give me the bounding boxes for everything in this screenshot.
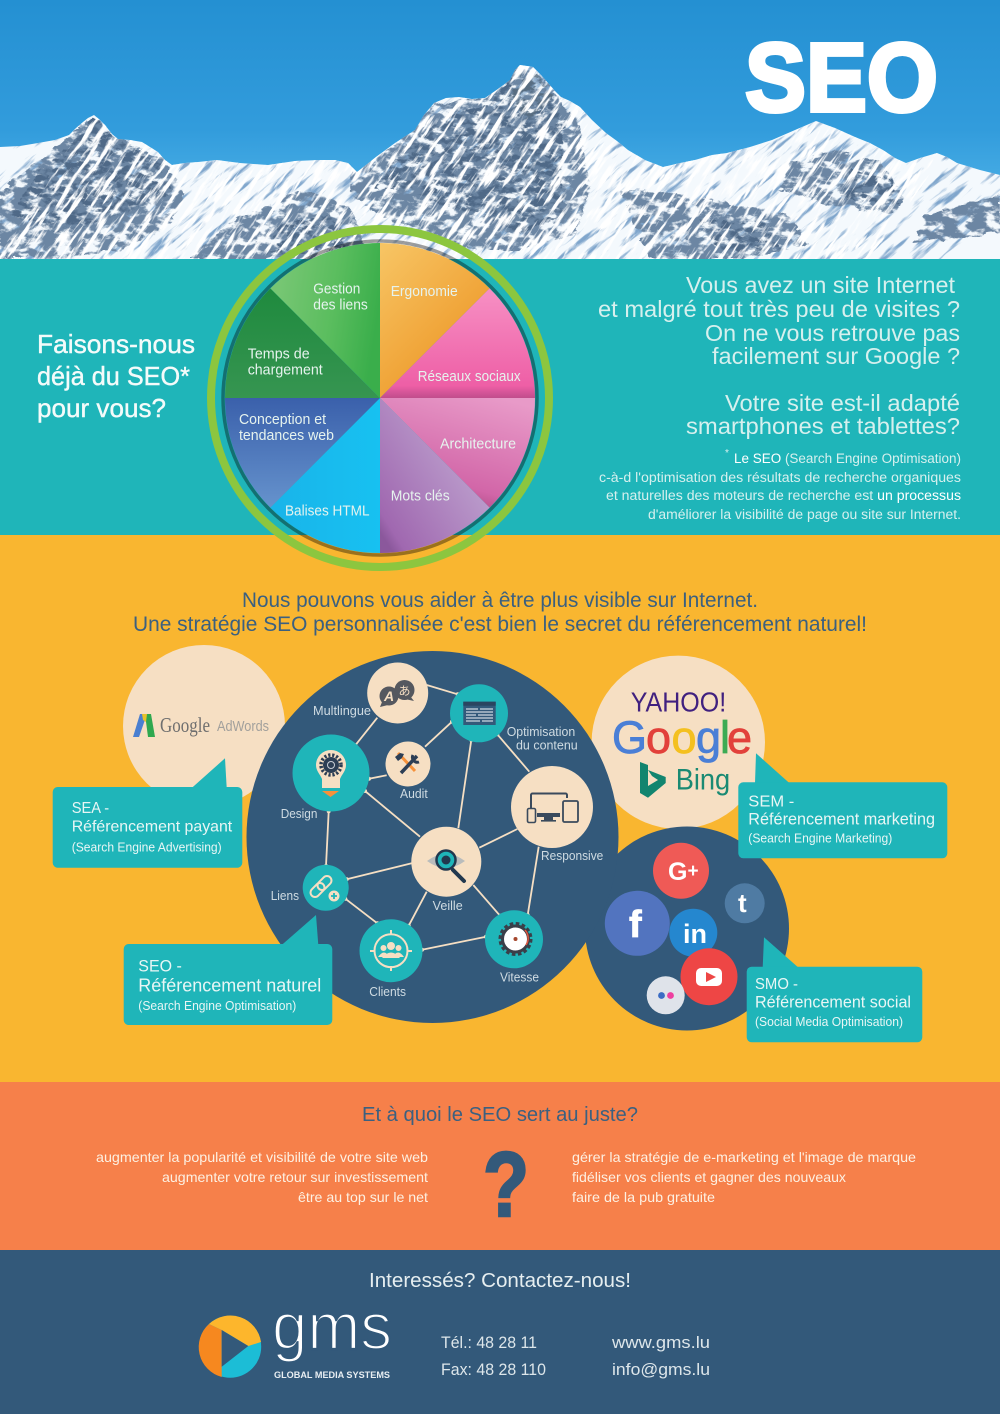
icon: Google plus: G bbox=[668, 858, 687, 886]
benefits heading: Et à quoi le SEO sert au juste? bbox=[362, 1104, 638, 1126]
callout: SEO: SEO - bbox=[138, 957, 182, 976]
SEO definition text: d'améliorer la visibilité de page ou site sur Internet. bbox=[648, 507, 961, 522]
pie labels: Réseaux sociaux bbox=[418, 369, 521, 385]
icon: question mark: ? bbox=[483, 1134, 529, 1236]
node: Optimisation du contenu bbox=[450, 684, 508, 742]
node: Multilingue bbox=[367, 662, 428, 724]
benefits list left: augmenter la popularité et visibilité de votre site web bbox=[96, 1149, 428, 1165]
callout: SEM: Référencement marketing bbox=[748, 811, 935, 829]
logo wordmark: gms bbox=[272, 1289, 392, 1363]
contact heading: Interessés? Contactez-nous! bbox=[369, 1270, 631, 1292]
logo: Google: l bbox=[720, 712, 730, 763]
SEO definition text bbox=[599, 448, 961, 522]
panel: contact band bbox=[0, 1250, 1000, 1414]
node: Audit bbox=[386, 742, 430, 786]
logo: Yahoo: YAHOO! bbox=[631, 687, 726, 718]
icon: YouTube bbox=[680, 948, 738, 1005]
intro questions text: On ne vous retrouve pas bbox=[705, 320, 960, 346]
SEM bubble: search engines bbox=[592, 656, 765, 829]
node: Vitesse bbox=[485, 910, 543, 968]
banner: mountain photo bbox=[0, 0, 1000, 259]
pie labels: chargement bbox=[248, 362, 323, 378]
node labels: Vitesse bbox=[500, 971, 539, 985]
callout: SEO: (Search Engine Optimisation) bbox=[138, 999, 296, 1013]
pie labels: Gestion bbox=[313, 282, 360, 298]
node labels bbox=[271, 704, 603, 999]
callout: SEM bbox=[738, 753, 947, 858]
pie labels: Ergonomie bbox=[391, 284, 458, 300]
icon: Google plus bbox=[653, 843, 709, 899]
icon: Tumblr bbox=[725, 883, 765, 923]
logo: Google: G bbox=[612, 712, 647, 763]
callout: SEO bbox=[124, 915, 332, 1025]
icon: Flickr bbox=[647, 976, 685, 1014]
logo: Google: o bbox=[646, 712, 671, 763]
callout: SEM: SEM - bbox=[748, 794, 794, 811]
contact details: info@gms.lu bbox=[612, 1360, 710, 1379]
intro questions text: Vous avez un site Internet bbox=[686, 272, 956, 298]
callout: SEM: (Search Engine Marketing) bbox=[748, 832, 892, 846]
intro questions text: et malgré tout très peu de visites ? bbox=[598, 296, 960, 322]
SEO definition text: * bbox=[725, 448, 729, 459]
benefits list left: augmenter votre retour sur investissement bbox=[162, 1169, 428, 1185]
node: Design bbox=[292, 734, 370, 812]
panel: strategy band bbox=[0, 535, 1000, 1082]
pie labels: Temps de bbox=[248, 346, 310, 362]
node labels: Audit bbox=[400, 787, 428, 801]
callout: SEO: Référencement naturel bbox=[138, 976, 321, 996]
logo: Google: e bbox=[727, 712, 752, 763]
logo: Google: o bbox=[672, 712, 697, 763]
icon: Tumblr: t bbox=[738, 888, 747, 918]
strategy heading bbox=[133, 589, 867, 636]
logo: GMS bbox=[199, 1289, 392, 1381]
pie labels: Conception et bbox=[239, 412, 326, 428]
benefits list right: gérer la stratégie de e-marketing et l'image de marque bbox=[572, 1149, 916, 1165]
pie labels: tendances web bbox=[239, 428, 334, 444]
SEO definition text: Le SEO (Search Engine Optimisation) bbox=[734, 451, 961, 466]
logo mark bbox=[199, 1315, 261, 1378]
pie labels: des liens bbox=[313, 298, 368, 314]
pie chart: SEO factors bbox=[211, 229, 549, 567]
icon: Google plus: + bbox=[687, 861, 699, 882]
node: Veille bbox=[411, 827, 481, 897]
connector lines bbox=[324, 685, 539, 952]
icon: Facebook bbox=[605, 891, 670, 956]
intro questions text bbox=[598, 272, 960, 439]
panel: intro band bbox=[0, 259, 1000, 535]
mountains bbox=[0, 65, 1000, 259]
logo: Bing bbox=[640, 762, 730, 798]
callout: SEA: Référencement payant bbox=[72, 819, 233, 836]
SEA bubble: Google AdWords bbox=[123, 645, 285, 807]
contact details: Tél.: 48 28 11 bbox=[441, 1333, 537, 1352]
heading: Faisons-nous: Faisons-nous bbox=[37, 329, 195, 359]
callout: SMO: Référencement social bbox=[755, 994, 911, 1012]
title: SEO: SEO bbox=[745, 23, 938, 132]
heading: Faisons-nous bbox=[37, 329, 195, 423]
pie labels bbox=[239, 282, 521, 520]
contact details bbox=[441, 1333, 710, 1379]
benefits list right: faire de la pub gratuite bbox=[572, 1189, 715, 1205]
node labels: Liens bbox=[271, 889, 299, 903]
node: Multilingue: A bbox=[383, 688, 394, 704]
intro questions text: smartphones et tablettes? bbox=[686, 413, 960, 439]
pie labels: Architecture bbox=[440, 436, 516, 452]
node: Clients bbox=[360, 919, 422, 982]
node: Liens bbox=[303, 865, 349, 911]
callout: SMO bbox=[747, 937, 922, 1042]
callout: SEA: (Search Engine Advertising) bbox=[72, 841, 222, 855]
heading: Faisons-nous: pour vous? bbox=[37, 393, 166, 423]
node labels: Optimisation bbox=[507, 725, 575, 739]
node labels: Veille bbox=[433, 899, 463, 913]
icon: AdWords bbox=[133, 714, 155, 737]
callout: SMO: SMO - bbox=[755, 976, 798, 993]
logo tagline: GLOBAL MEDIA SYSTEMS bbox=[274, 1370, 390, 1381]
network diagram bbox=[246, 651, 618, 1023]
contact details: www.gms.lu bbox=[611, 1333, 710, 1352]
icon: LinkedIn: in bbox=[683, 919, 707, 949]
node labels: Clients bbox=[369, 985, 406, 999]
pie labels: Balises HTML bbox=[285, 504, 370, 520]
benefits list right bbox=[572, 1149, 916, 1205]
panel: benefits band bbox=[0, 1082, 1000, 1250]
node: Responsive bbox=[511, 766, 593, 848]
intro questions text: Votre site est-il adapté bbox=[725, 390, 960, 416]
strategy heading: Nous pouvons vous aider à être plus visible sur Internet. bbox=[242, 589, 758, 612]
contact details: Fax: 48 28 110 bbox=[441, 1360, 546, 1379]
node labels: Responsive bbox=[541, 849, 603, 863]
node: Multilingue: あ bbox=[398, 682, 411, 699]
benefits list left: être au top sur le net bbox=[298, 1189, 428, 1205]
SMO bubble: social networks bbox=[585, 826, 789, 1030]
callout: SEA: SEA - bbox=[72, 800, 109, 817]
SEA bubble: Google AdWords: AdWords bbox=[217, 719, 269, 735]
icon: LinkedIn bbox=[669, 909, 717, 957]
benefits list left bbox=[96, 1149, 428, 1205]
node labels: Design bbox=[281, 807, 317, 821]
icon: Facebook: f bbox=[629, 904, 642, 946]
logo: Google: g bbox=[696, 712, 721, 763]
intro questions text: facilement sur Google ? bbox=[712, 343, 960, 369]
SEO definition text: et naturelles des moteurs de recherche est un processus bbox=[606, 488, 961, 503]
callout: SMO: (Social Media Optimisation) bbox=[755, 1015, 903, 1029]
benefits list right: fidéliser vos clients et gagner des nouveaux bbox=[572, 1169, 846, 1185]
logo text: Google bbox=[160, 713, 210, 737]
strategy heading: Une stratégie SEO personnalisée c'est bien le secret du référencement naturel! bbox=[133, 613, 867, 636]
pie labels: Mots clés bbox=[391, 489, 450, 505]
heading: Faisons-nous: déjà du SEO* bbox=[37, 361, 190, 391]
SEO definition text: c-à-d l'optimisation des résultats de recherche organiques bbox=[599, 470, 961, 485]
callout: SEA bbox=[53, 758, 242, 868]
node labels: Multlingue bbox=[313, 704, 371, 718]
logo: Bing: Bing bbox=[676, 763, 730, 796]
node labels: du contenu bbox=[516, 738, 578, 752]
